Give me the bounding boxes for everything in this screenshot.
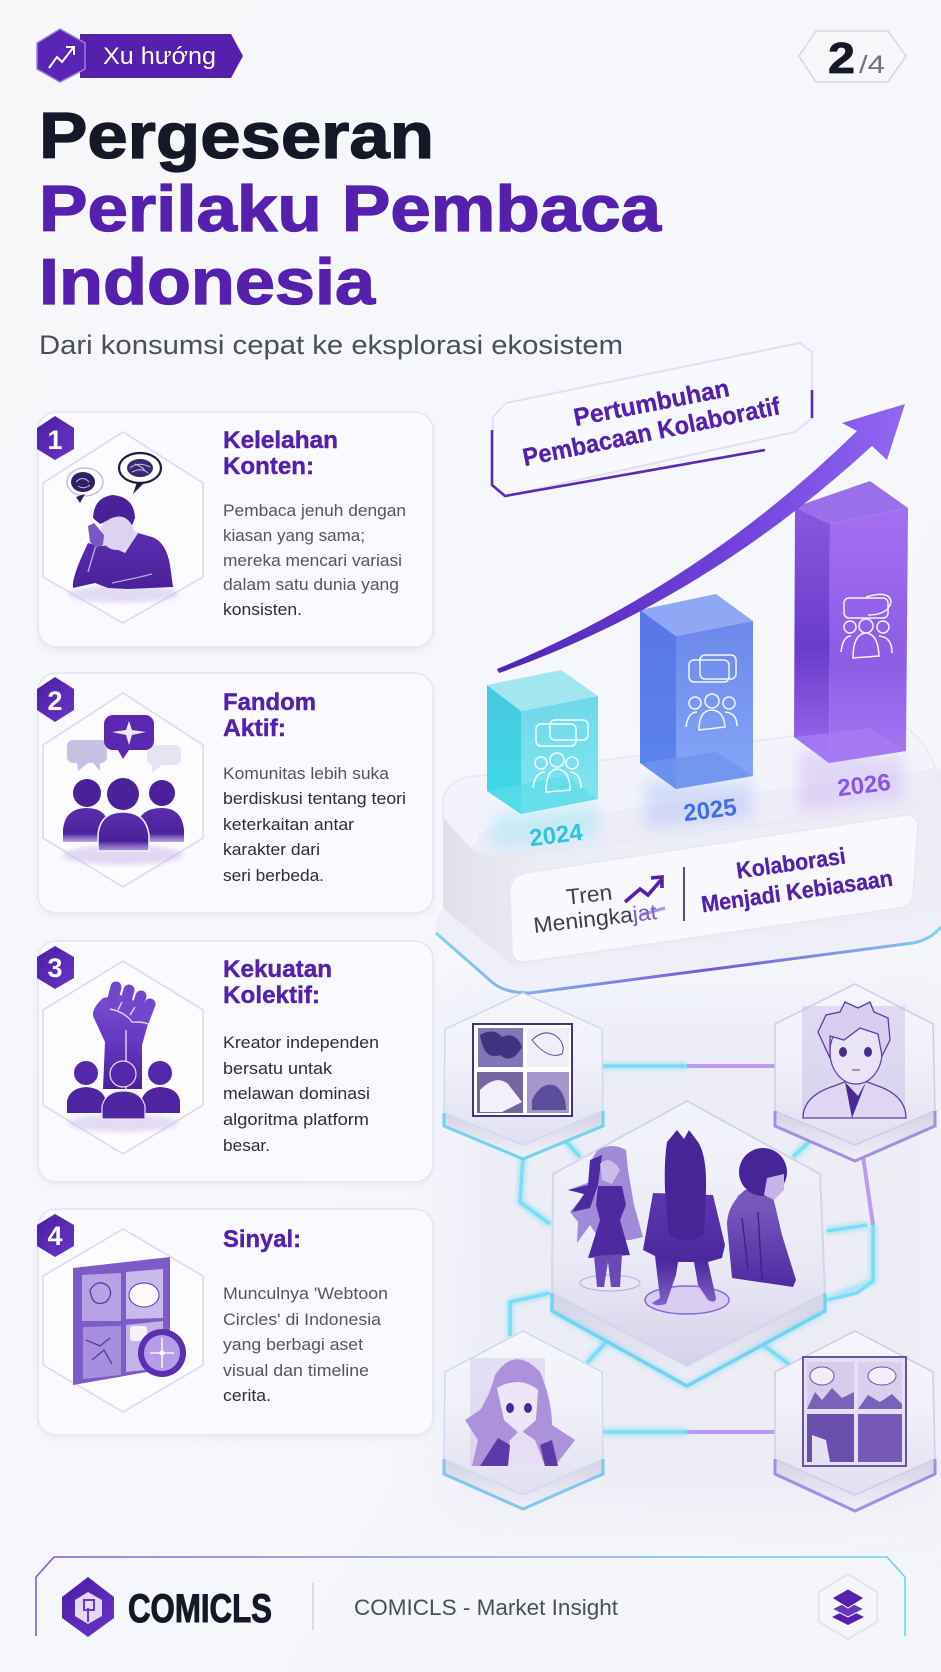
- hexagon frame: [43, 1229, 203, 1412]
- number 1: [37, 416, 74, 460]
- icon: tired reader: [67, 453, 178, 603]
- panel: Fandom Aktif: [37, 673, 433, 915]
- connector lines: [510, 1066, 873, 1432]
- title: Indonesia: [39, 245, 376, 318]
- number 1: 1: [47, 425, 63, 455]
- body text: kiasan yang sama;: [223, 526, 365, 545]
- badge: Xu hướng: Xu hướng: [103, 43, 216, 70]
- hexagon frame: [43, 432, 203, 623]
- panel: Kelelahan Konten: Konten:: [223, 453, 314, 480]
- body text: Munculnya 'Webtoon: [223, 1284, 388, 1303]
- hexagon: boy portrait: [775, 984, 935, 1161]
- heading: Sinyal:: [223, 1226, 301, 1253]
- page counter 2/4: /4: [859, 51, 885, 79]
- body text: Kreator independen: [223, 1033, 379, 1052]
- label plate: Kolaborasi: [735, 843, 847, 884]
- panel: Fandom Aktif: Aktif:: [223, 715, 286, 742]
- logo: COMICLS hexagon: [62, 1577, 114, 1637]
- body text: Circles' di Indonesia: [223, 1310, 382, 1329]
- number 2: 2: [47, 686, 63, 716]
- heading: Kekuatan: [223, 956, 332, 983]
- body text: mereka mencari variasi: [223, 551, 402, 570]
- body text: [223, 1033, 379, 1155]
- body text: algoritma platform: [223, 1110, 369, 1129]
- year labels: 2024: [528, 819, 585, 852]
- title: Perilaku Pembaca: [39, 172, 662, 245]
- body text: [223, 1284, 388, 1405]
- hexagon: comic panels purple: [775, 1331, 935, 1511]
- number 4: [37, 1214, 74, 1257]
- body text: berdiskusi tentang teori: [223, 789, 406, 808]
- body text: Pembaca jenuh dengan: [223, 501, 406, 520]
- panel: Kekuatan Kolektif: [37, 941, 433, 1184]
- icon: discussion group: [63, 715, 184, 865]
- icon: raised fist with people: [67, 987, 180, 1132]
- number 2: [37, 677, 74, 722]
- body text: karakter dari: [223, 840, 320, 859]
- page counter 2/4: [799, 31, 906, 83]
- year labels: 2025: [682, 794, 738, 827]
- character: long-haired figure: [643, 1130, 729, 1314]
- panel: glass platform base: [436, 724, 941, 993]
- body text: keterkaitan antar: [223, 815, 354, 834]
- page counter 2/4: 2: [828, 34, 855, 83]
- icon: people outline: [686, 655, 737, 730]
- panel: Kelelahan Konten: [37, 412, 433, 650]
- body text: yang berbagi aset: [223, 1335, 363, 1354]
- title: [39, 99, 662, 318]
- icon: people outline: [841, 594, 892, 658]
- icon: layers badge: [819, 1574, 877, 1639]
- body text: [223, 764, 406, 885]
- hexagon: girl portrait: [444, 1331, 603, 1509]
- icon: comic page and clock: [73, 1257, 186, 1385]
- hexagon: comic panels: [444, 993, 603, 1159]
- body text: seri berbeda.: [223, 866, 324, 885]
- bar: 2026: [794, 481, 908, 763]
- title: Pergeseran: [39, 99, 434, 172]
- wordmark: COMICLS: [128, 1587, 272, 1631]
- footer caption: COMICLS - Market Insight: [354, 1595, 618, 1620]
- body text: besar.: [223, 1136, 270, 1155]
- hexagon frame: [43, 693, 203, 887]
- heading: Fandom: [223, 689, 316, 716]
- label plate: Meningkajat: [532, 899, 658, 938]
- number 4: 4: [47, 1221, 63, 1251]
- character: boy in hoodie: [727, 1148, 796, 1287]
- subtitle: Dari konsumsi cepat ke eksplorasi ekosistem: [39, 330, 623, 360]
- icon: people outline: [533, 720, 588, 792]
- panel: Sinyal: [37, 1209, 433, 1437]
- label plate: [510, 815, 918, 962]
- heading: Kelelahan: [223, 427, 338, 454]
- badge: Xu hướng: [37, 29, 243, 82]
- year labels: [528, 769, 892, 852]
- number 3: 3: [47, 953, 63, 983]
- hexagon frame: [43, 961, 203, 1154]
- arrow: growth: [497, 404, 905, 673]
- sign: chart title: Pembacaan Kolaboratif: [520, 392, 783, 472]
- body text: melawan dominasi: [223, 1084, 370, 1103]
- footer frame: [36, 1557, 905, 1636]
- icon: trend up: [625, 877, 665, 915]
- panel: Kekuatan Kolektif: Kolektif:: [223, 982, 320, 1009]
- body text: cerita.: [223, 1386, 271, 1405]
- number 3: [37, 946, 74, 989]
- body text: bersatu untak: [223, 1059, 333, 1078]
- icon: trending hexagon: [37, 29, 85, 82]
- body text: konsisten.: [223, 600, 302, 619]
- sign: chart title: [492, 343, 812, 496]
- label plate: Tren: [565, 880, 613, 910]
- character: girl: [568, 1146, 643, 1291]
- body text: visual dan timeline: [223, 1361, 369, 1380]
- sign: chart title: Pertumbuhan: [571, 374, 732, 432]
- year labels: 2026: [836, 769, 892, 802]
- bar: 2024: [487, 670, 598, 814]
- body text: [223, 501, 406, 619]
- hexagon: central characters: [552, 1101, 825, 1386]
- body text: Komunitas lebih suka: [223, 764, 390, 783]
- bar: 2025: [640, 594, 753, 789]
- body text: dalam satu dunia yang: [223, 575, 399, 594]
- label plate: Menjadi Kebiasaan: [700, 865, 894, 917]
